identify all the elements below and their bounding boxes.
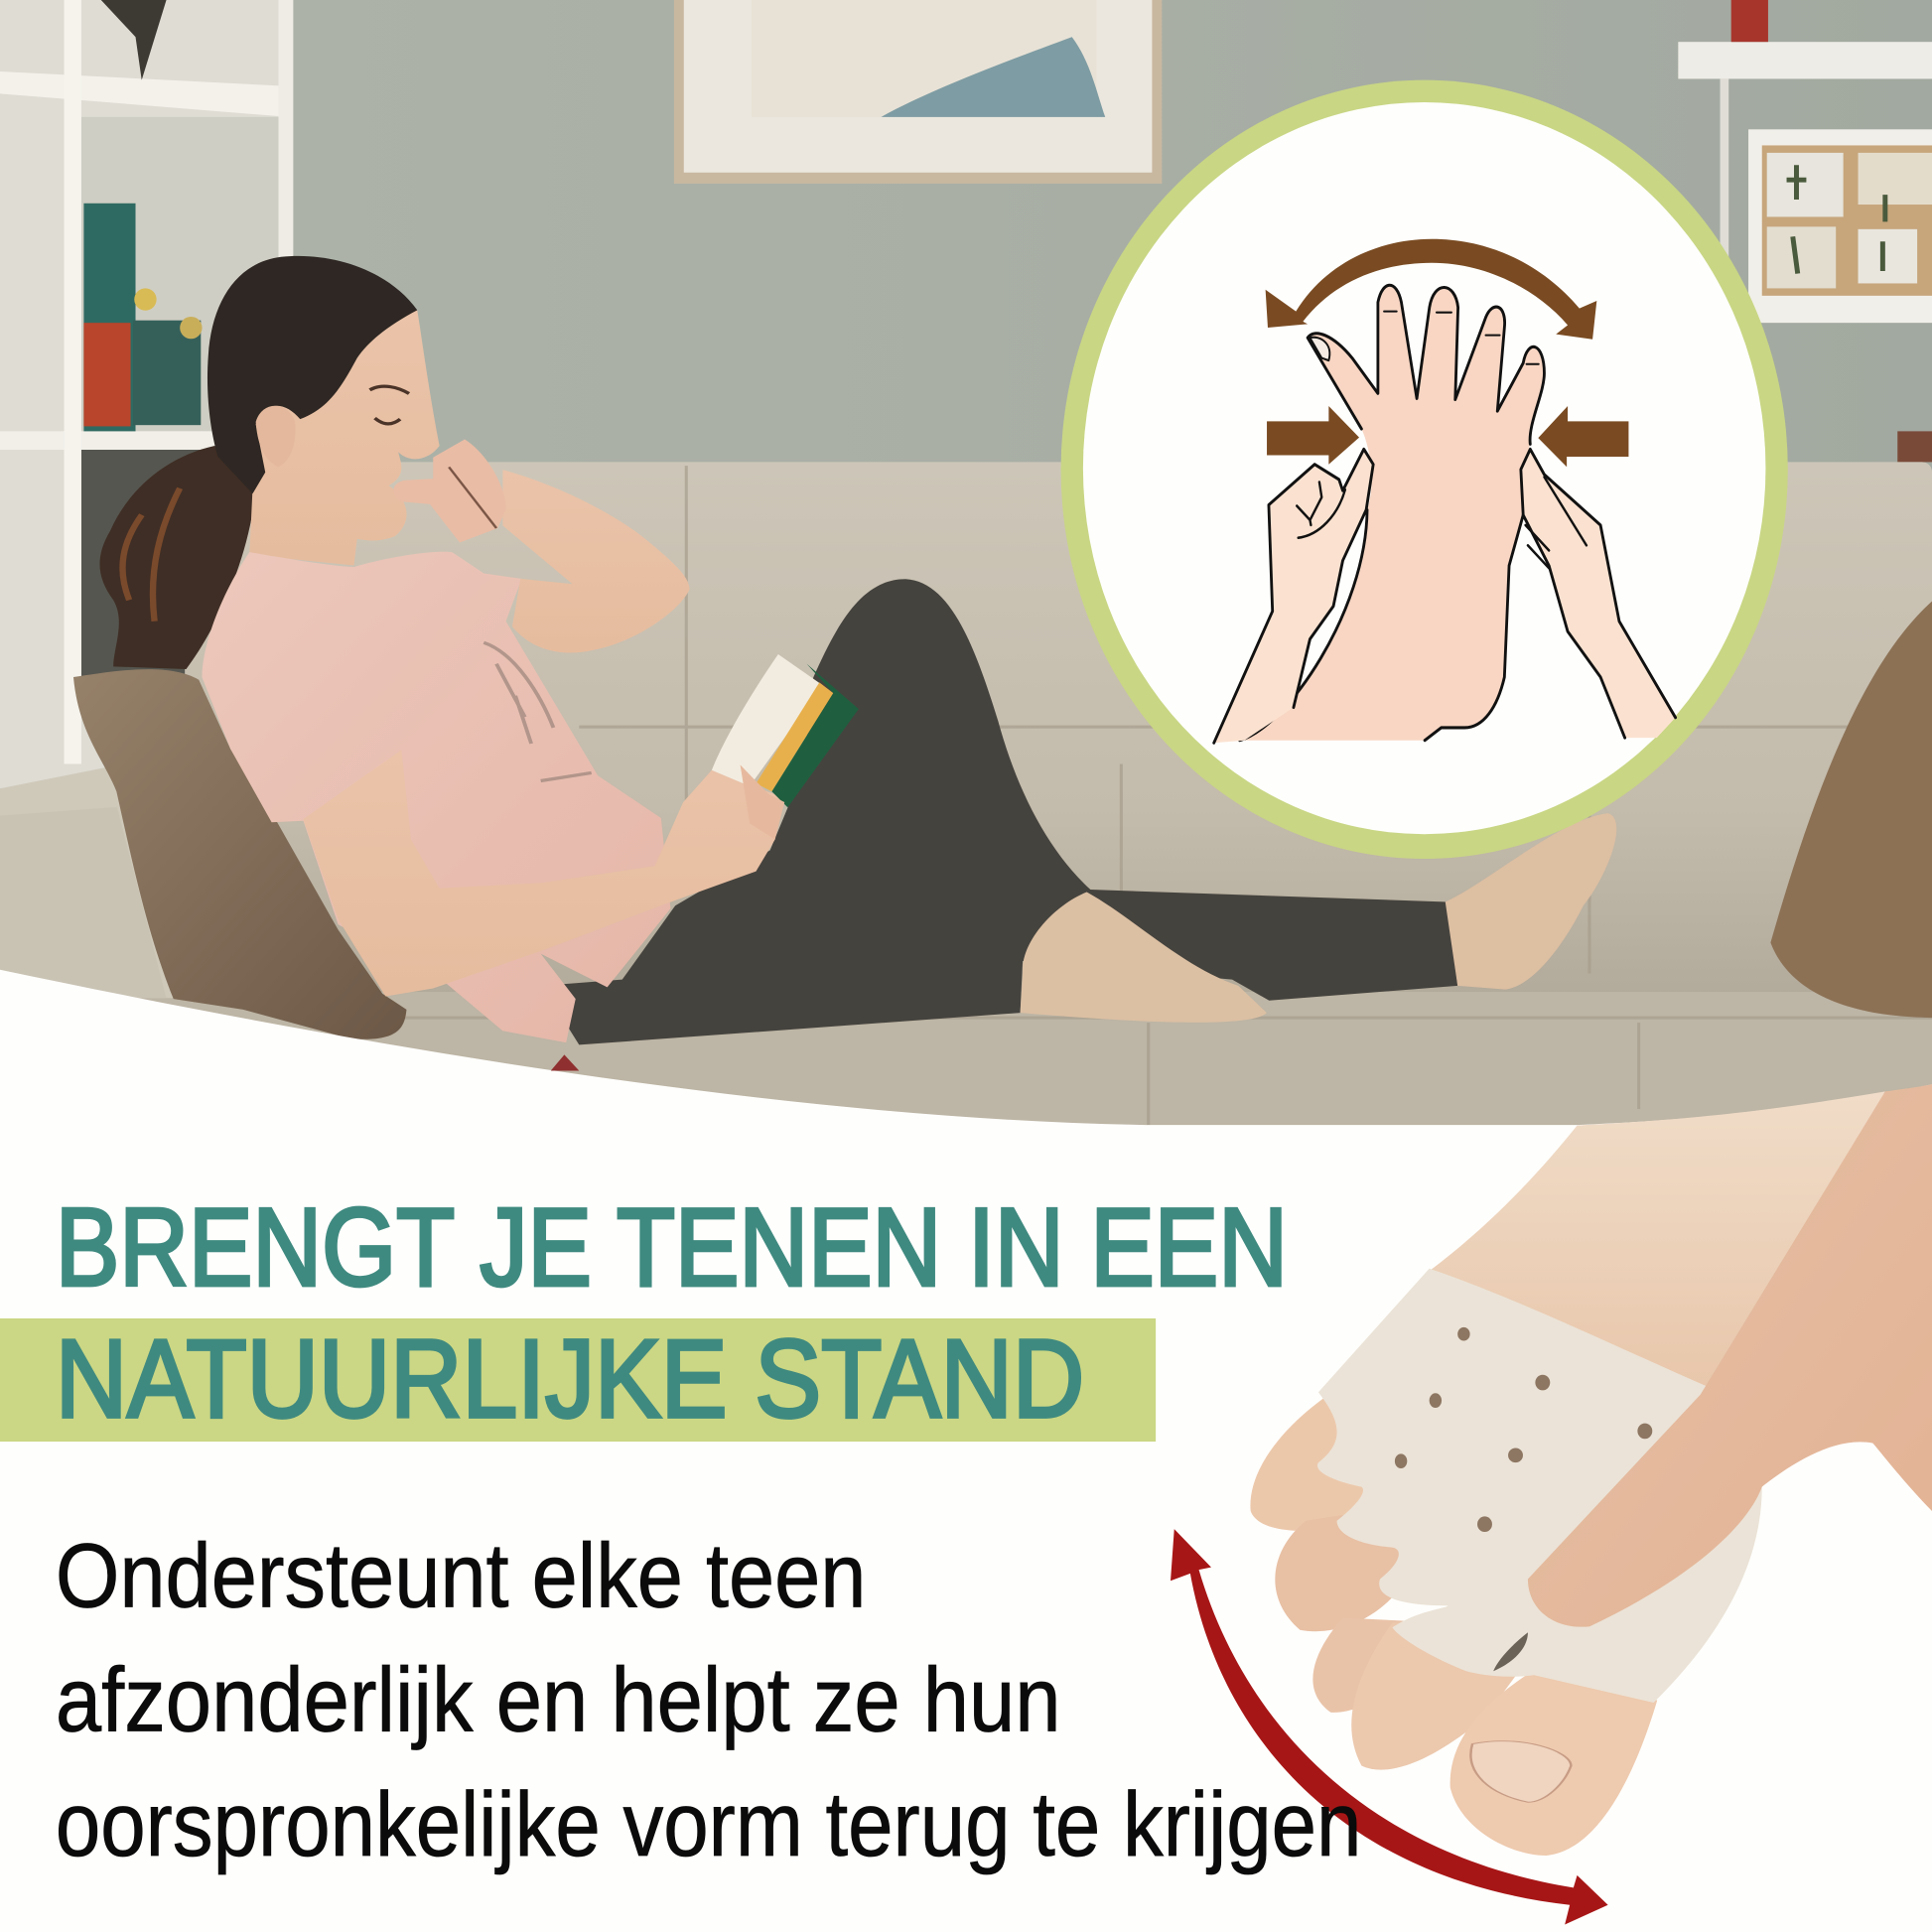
ponytail [99,446,256,669]
left white bookshelf [0,0,293,788]
foot with silicone toe separator [1250,1084,1932,1856]
eye and brow [369,386,409,424]
right helping hand fill [1521,449,1676,738]
small red object at the sofa edge [551,1054,579,1070]
foot outline [1240,285,1544,741]
shirt print [483,642,592,781]
ponytail highlights [122,488,180,621]
raised arm [502,470,690,653]
left pressing arrow [1267,406,1359,465]
book [712,654,822,786]
right pressing arrow [1538,406,1628,467]
foot fill drawn from above [1240,285,1544,741]
hand exercise circle illustration [1061,80,1788,859]
helping hand and thumb [1528,1084,1932,1627]
body text: oorspronkelijke vorm terug te krijgen [56,1774,1361,1875]
right shelf with pictures [1678,0,1932,485]
heading line 2: NATUURLIJKE STAND [56,1316,1084,1441]
silicone sleeve [1317,1269,1762,1703]
sofa [0,462,1932,1134]
curved double arrow [1266,239,1596,340]
t-shirt [202,552,670,1042]
big toe [1450,1666,1657,1856]
toe nails [1310,338,1329,360]
upper foot [1430,1091,1885,1400]
body text [56,1525,1361,1875]
heading line 1: BRENGT JE TENEN IN EEN [56,1184,1288,1309]
left helping hand fill [1214,449,1373,743]
highlight bar behind second heading line [0,1318,1156,1442]
white curved lower panel [0,970,1932,1932]
ear [256,406,296,467]
toe nail [1470,1741,1571,1802]
dark gap beneath sleeve [1493,1632,1528,1671]
circle badge [1061,80,1788,859]
pillow behind her back [73,669,406,1039]
red double-headed arrow [1171,1529,1608,1925]
framed picture [674,0,1162,184]
right hand outline [1521,449,1676,738]
hair [207,256,417,493]
left hand fingers [1297,483,1345,538]
leggings [542,579,1457,1044]
upper body, head and arms [99,256,859,1042]
standing-knee foot [1021,893,1267,1023]
lower arm holding book [303,750,781,996]
body text: Ondersteunt elke teen [56,1525,866,1626]
far foot [1446,813,1616,990]
left hand outline [1214,449,1373,743]
neck and face [249,310,440,566]
body text: afzonderlijk en helpt ze hun [56,1650,1061,1751]
hand at mouth [393,440,506,542]
right hand finger lines [1526,477,1587,568]
fingers on book [741,764,784,839]
ventilation holes [1395,1327,1652,1532]
scene: living room background [0,0,1932,1146]
woman reading on the sofa [73,256,1616,1044]
small toes [1250,1385,1405,1531]
